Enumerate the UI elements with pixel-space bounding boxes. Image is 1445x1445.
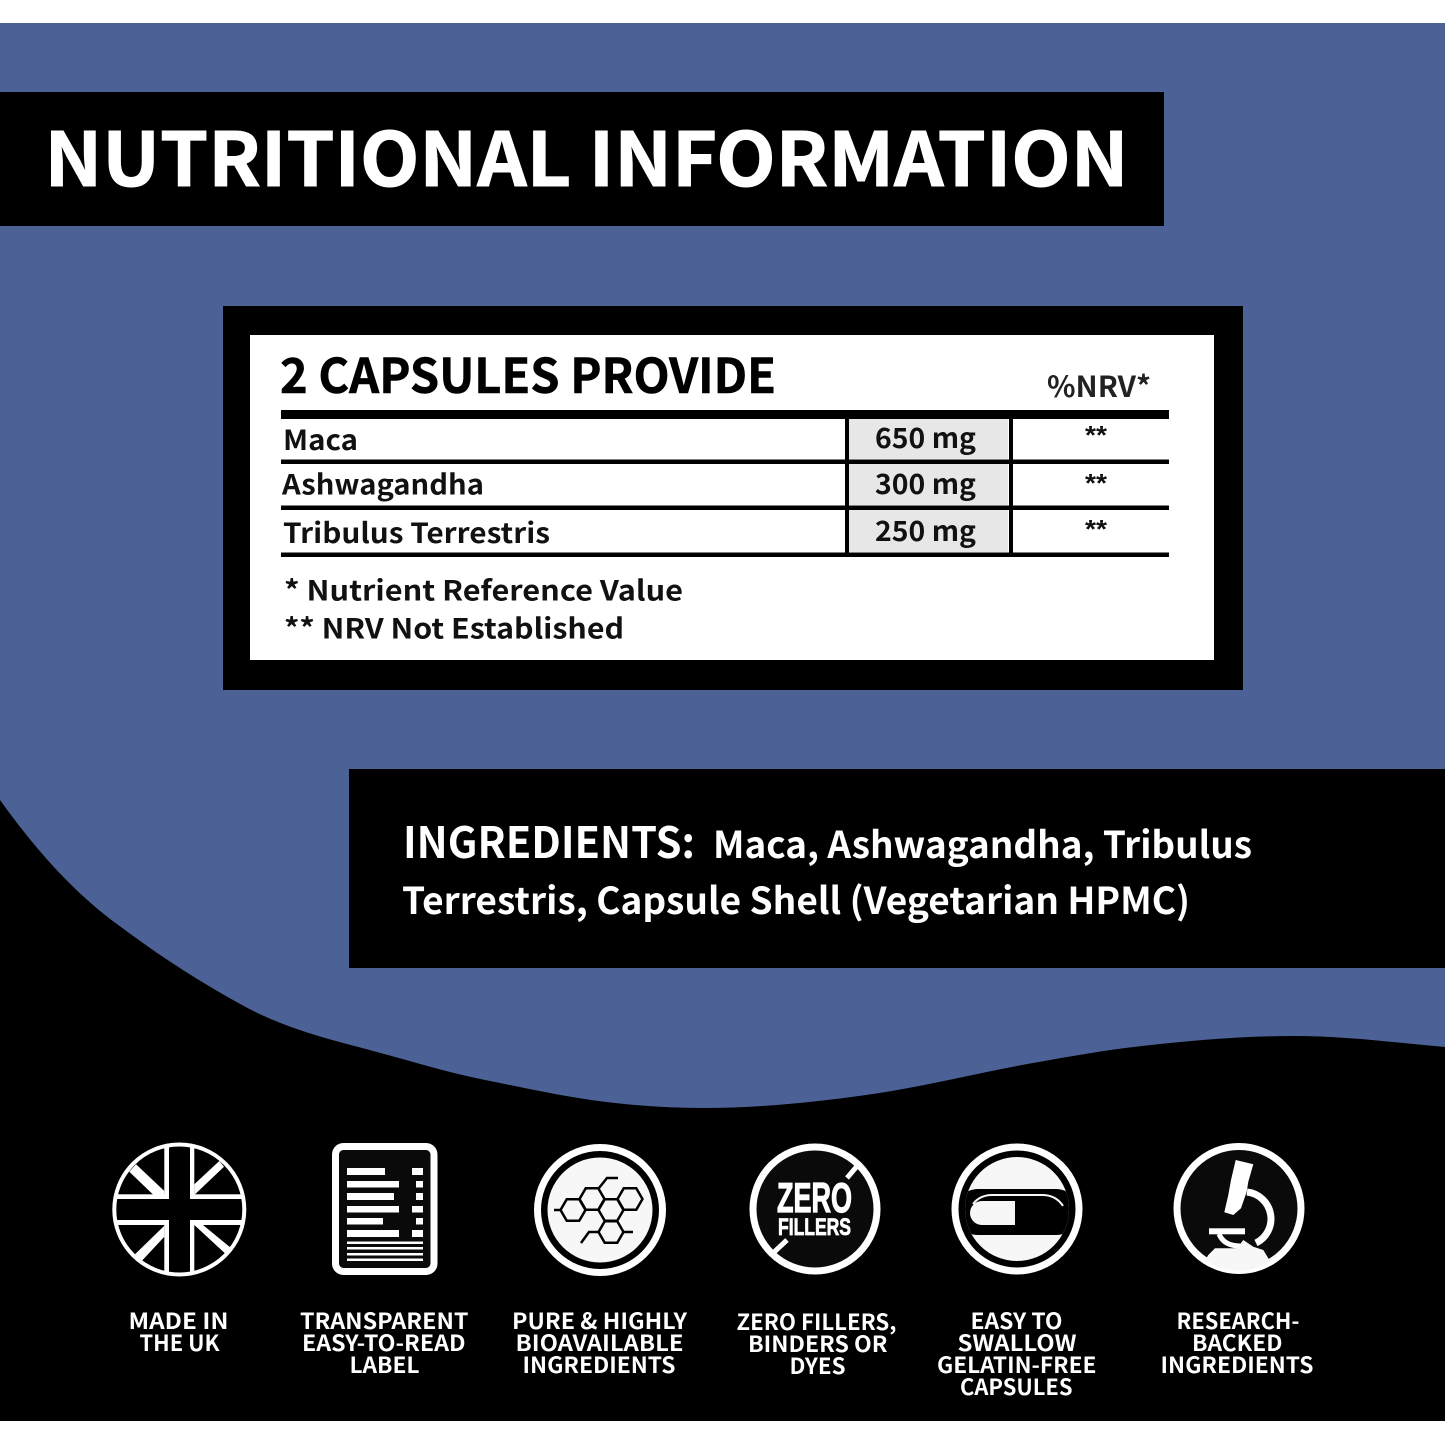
row: Ashwagandha: ** xyxy=(1085,468,1108,498)
label: made in the UK: MADE IN xyxy=(128,1304,228,1336)
label: made in the UK xyxy=(128,1304,228,1358)
label: pure ingredients: BIOAVAILABLE xyxy=(516,1326,684,1358)
label: easy to swallow: CAPSULES xyxy=(960,1370,1072,1402)
ingredients text: Terrestris, Capsule Shell (Vegetarian HPMC) xyxy=(402,871,1190,925)
table footnotes: * Nutrient Reference Value xyxy=(284,570,683,610)
panel: ingredients xyxy=(349,769,1445,968)
black wave xyxy=(0,800,1445,1421)
row: Tribulus Terrestris: 250 mg xyxy=(875,510,976,550)
label: pure ingredients xyxy=(512,1304,687,1380)
panel: nutrition table xyxy=(223,306,1243,690)
label: transparent label: EASY-TO-READ xyxy=(302,1326,466,1358)
label: easy to swallow: EASY TO xyxy=(970,1304,1062,1336)
label: easy to swallow xyxy=(937,1304,1096,1402)
table footnotes xyxy=(284,570,683,648)
icon: label document xyxy=(336,1146,434,1272)
label: transparent label: TRANSPARENT xyxy=(300,1304,469,1336)
amount cells xyxy=(849,419,1008,552)
label: research backed: INGREDIENTS xyxy=(1160,1348,1314,1380)
icon: UK flag xyxy=(114,1144,245,1275)
icon: molecule xyxy=(538,1148,662,1272)
row: Ashwagandha xyxy=(281,463,1108,504)
row: Maca: 650 mg xyxy=(875,417,976,457)
ingredients text xyxy=(402,809,1252,925)
icon: capsule xyxy=(955,1147,1079,1271)
label: made in the UK: THE UK xyxy=(140,1326,220,1358)
label: transparent label xyxy=(300,1304,469,1380)
label: transparent label: LABEL xyxy=(350,1348,420,1380)
row: Maca: ** xyxy=(1085,420,1108,450)
ingredients text: INGREDIENTS: xyxy=(403,809,695,871)
table heading: 2 CAPSULES PROVIDE xyxy=(280,337,776,407)
label: zero fillers: ZERO FILLERS, xyxy=(736,1305,896,1337)
row: Tribulus Terrestris xyxy=(283,510,1108,552)
table footnotes: ** NRV Not Established xyxy=(284,608,624,648)
row: Maca: Maca xyxy=(283,419,358,459)
row: Ashwagandha: 300 mg xyxy=(875,463,976,503)
icon: zero fillers: ZERO xyxy=(777,1174,852,1221)
label: easy to swallow: SWALLOW xyxy=(958,1326,1076,1358)
label: easy to swallow: GELATIN-FREE xyxy=(937,1348,1096,1380)
table rules xyxy=(281,410,1169,557)
label: research backed xyxy=(1160,1304,1314,1380)
label: pure ingredients: INGREDIENTS xyxy=(522,1348,676,1380)
label: research backed: RESEARCH- xyxy=(1176,1304,1300,1336)
ingredients text: Maca, Ashwagandha, Tribulus xyxy=(713,815,1252,869)
label: zero fillers xyxy=(736,1305,896,1381)
title banner xyxy=(0,92,1164,226)
icon: microscope xyxy=(1177,1146,1301,1285)
icon: zero fillers: FILLERS xyxy=(778,1214,851,1241)
title: NUTRITIONAL INFORMATION xyxy=(44,101,1128,208)
row: Tribulus Terrestris: Tribulus Terrestris xyxy=(283,512,550,552)
icon: zero fillers xyxy=(753,1147,877,1271)
row: Ashwagandha: Ashwagandha xyxy=(281,464,484,504)
label: zero fillers: BINDERS OR xyxy=(748,1327,888,1359)
label: research backed: BACKED xyxy=(1192,1326,1282,1358)
column heading: NRV: %NRV* xyxy=(1047,364,1151,406)
row: Maca xyxy=(283,417,1108,459)
row: Tribulus Terrestris: ** xyxy=(1085,514,1108,544)
label: pure ingredients: PURE & HIGHLY xyxy=(512,1304,687,1336)
label: zero fillers: DYES xyxy=(790,1349,846,1381)
